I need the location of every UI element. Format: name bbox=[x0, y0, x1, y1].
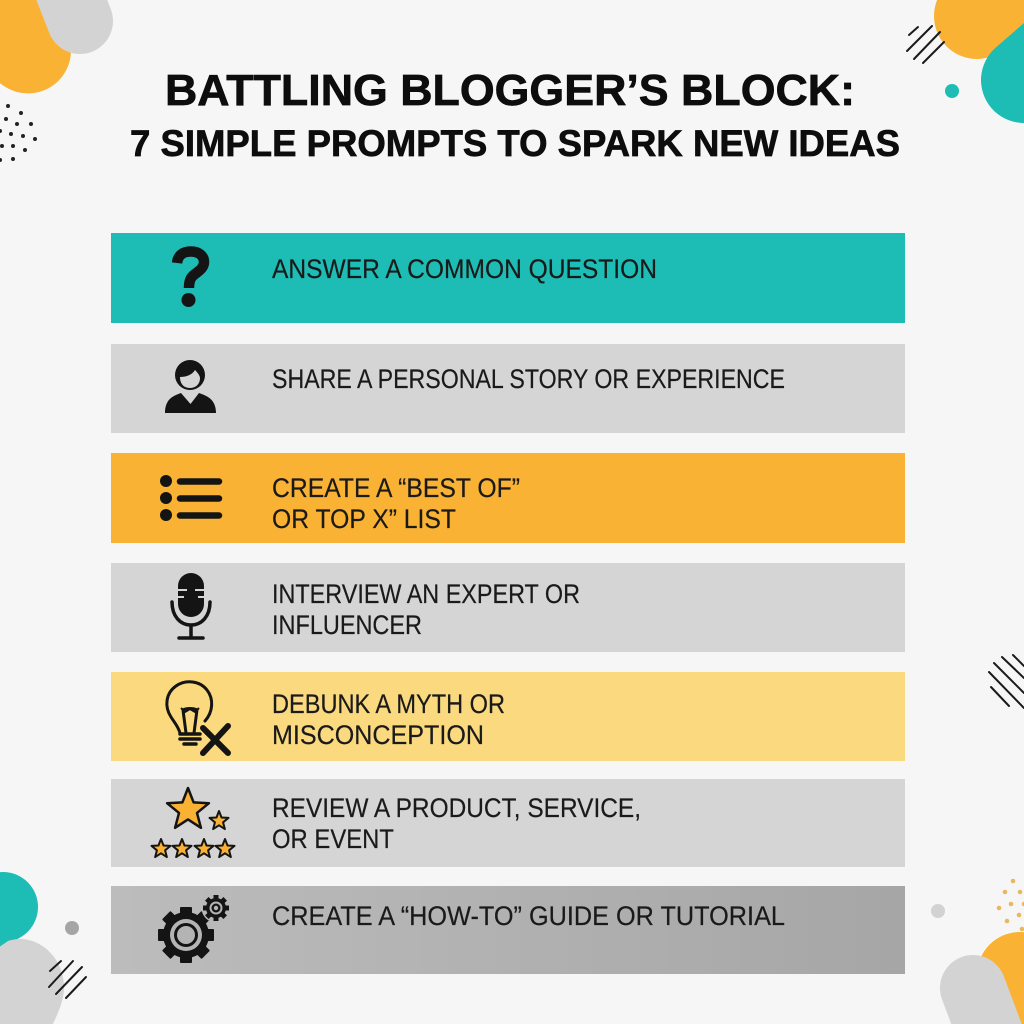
title bbox=[130, 66, 900, 164]
icon: list bbox=[160, 475, 219, 521]
icon: microphone bbox=[172, 573, 210, 638]
decoration: bottom left blobs and hatch bbox=[0, 907, 86, 1024]
title: 7 SIMPLE PROMPTS TO SPARK NEW IDEAS bbox=[130, 123, 900, 164]
prompt text 4: INTERVIEW AN EXPERT OR bbox=[272, 579, 580, 609]
prompt text 2: SHARE A PERSONAL STORY OR EXPERIENCE bbox=[272, 364, 785, 394]
icon: person bbox=[165, 360, 216, 413]
prompt text 6: OR EVENT bbox=[272, 824, 394, 854]
decoration: bottom right blobs and dots bbox=[931, 879, 1024, 1024]
prompt text 3 bbox=[272, 473, 520, 534]
prompt text 6: REVIEW A PRODUCT, SERVICE, bbox=[272, 793, 641, 823]
panel: prompt 3 best of list bbox=[111, 453, 905, 543]
panel: prompt 5 debunk a myth bbox=[111, 672, 905, 761]
prompt text 4: INFLUENCER bbox=[272, 610, 422, 640]
decoration: top left blobs and dots bbox=[0, 0, 80, 162]
prompt text 6 bbox=[272, 793, 641, 854]
panel: prompt 7 how-to guide bbox=[111, 886, 905, 974]
decoration: right hatch bbox=[989, 655, 1024, 708]
icon: question mark bbox=[177, 252, 204, 307]
prompt text 3: OR TOP X” LIST bbox=[272, 504, 456, 534]
panel: prompt 6 review bbox=[111, 779, 905, 867]
decoration: top right blobs and hatch bbox=[907, 0, 1024, 98]
icon: gears bbox=[158, 894, 230, 963]
panel: prompt 2 personal story bbox=[111, 344, 905, 433]
prompt text 7: CREATE A “HOW-TO” GUIDE OR TUTORIAL bbox=[272, 901, 785, 931]
panel: prompt 4 interview bbox=[111, 563, 905, 652]
prompt text 5 bbox=[272, 689, 505, 750]
prompt text 4 bbox=[272, 579, 580, 640]
icon: light bulb with cross bbox=[167, 682, 228, 753]
icon: stars bbox=[151, 788, 235, 857]
prompt text 3: CREATE A “BEST OF” bbox=[272, 473, 520, 503]
prompt text 1: ANSWER A COMMON QUESTION bbox=[272, 254, 657, 284]
prompt text 5: DEBUNK A MYTH OR bbox=[272, 689, 505, 719]
prompt text 5: MISCONCEPTION bbox=[272, 720, 484, 750]
title: BATTLING BLOGGER’S BLOCK: bbox=[165, 66, 855, 115]
panel: prompt 1 answer a question bbox=[111, 233, 905, 323]
